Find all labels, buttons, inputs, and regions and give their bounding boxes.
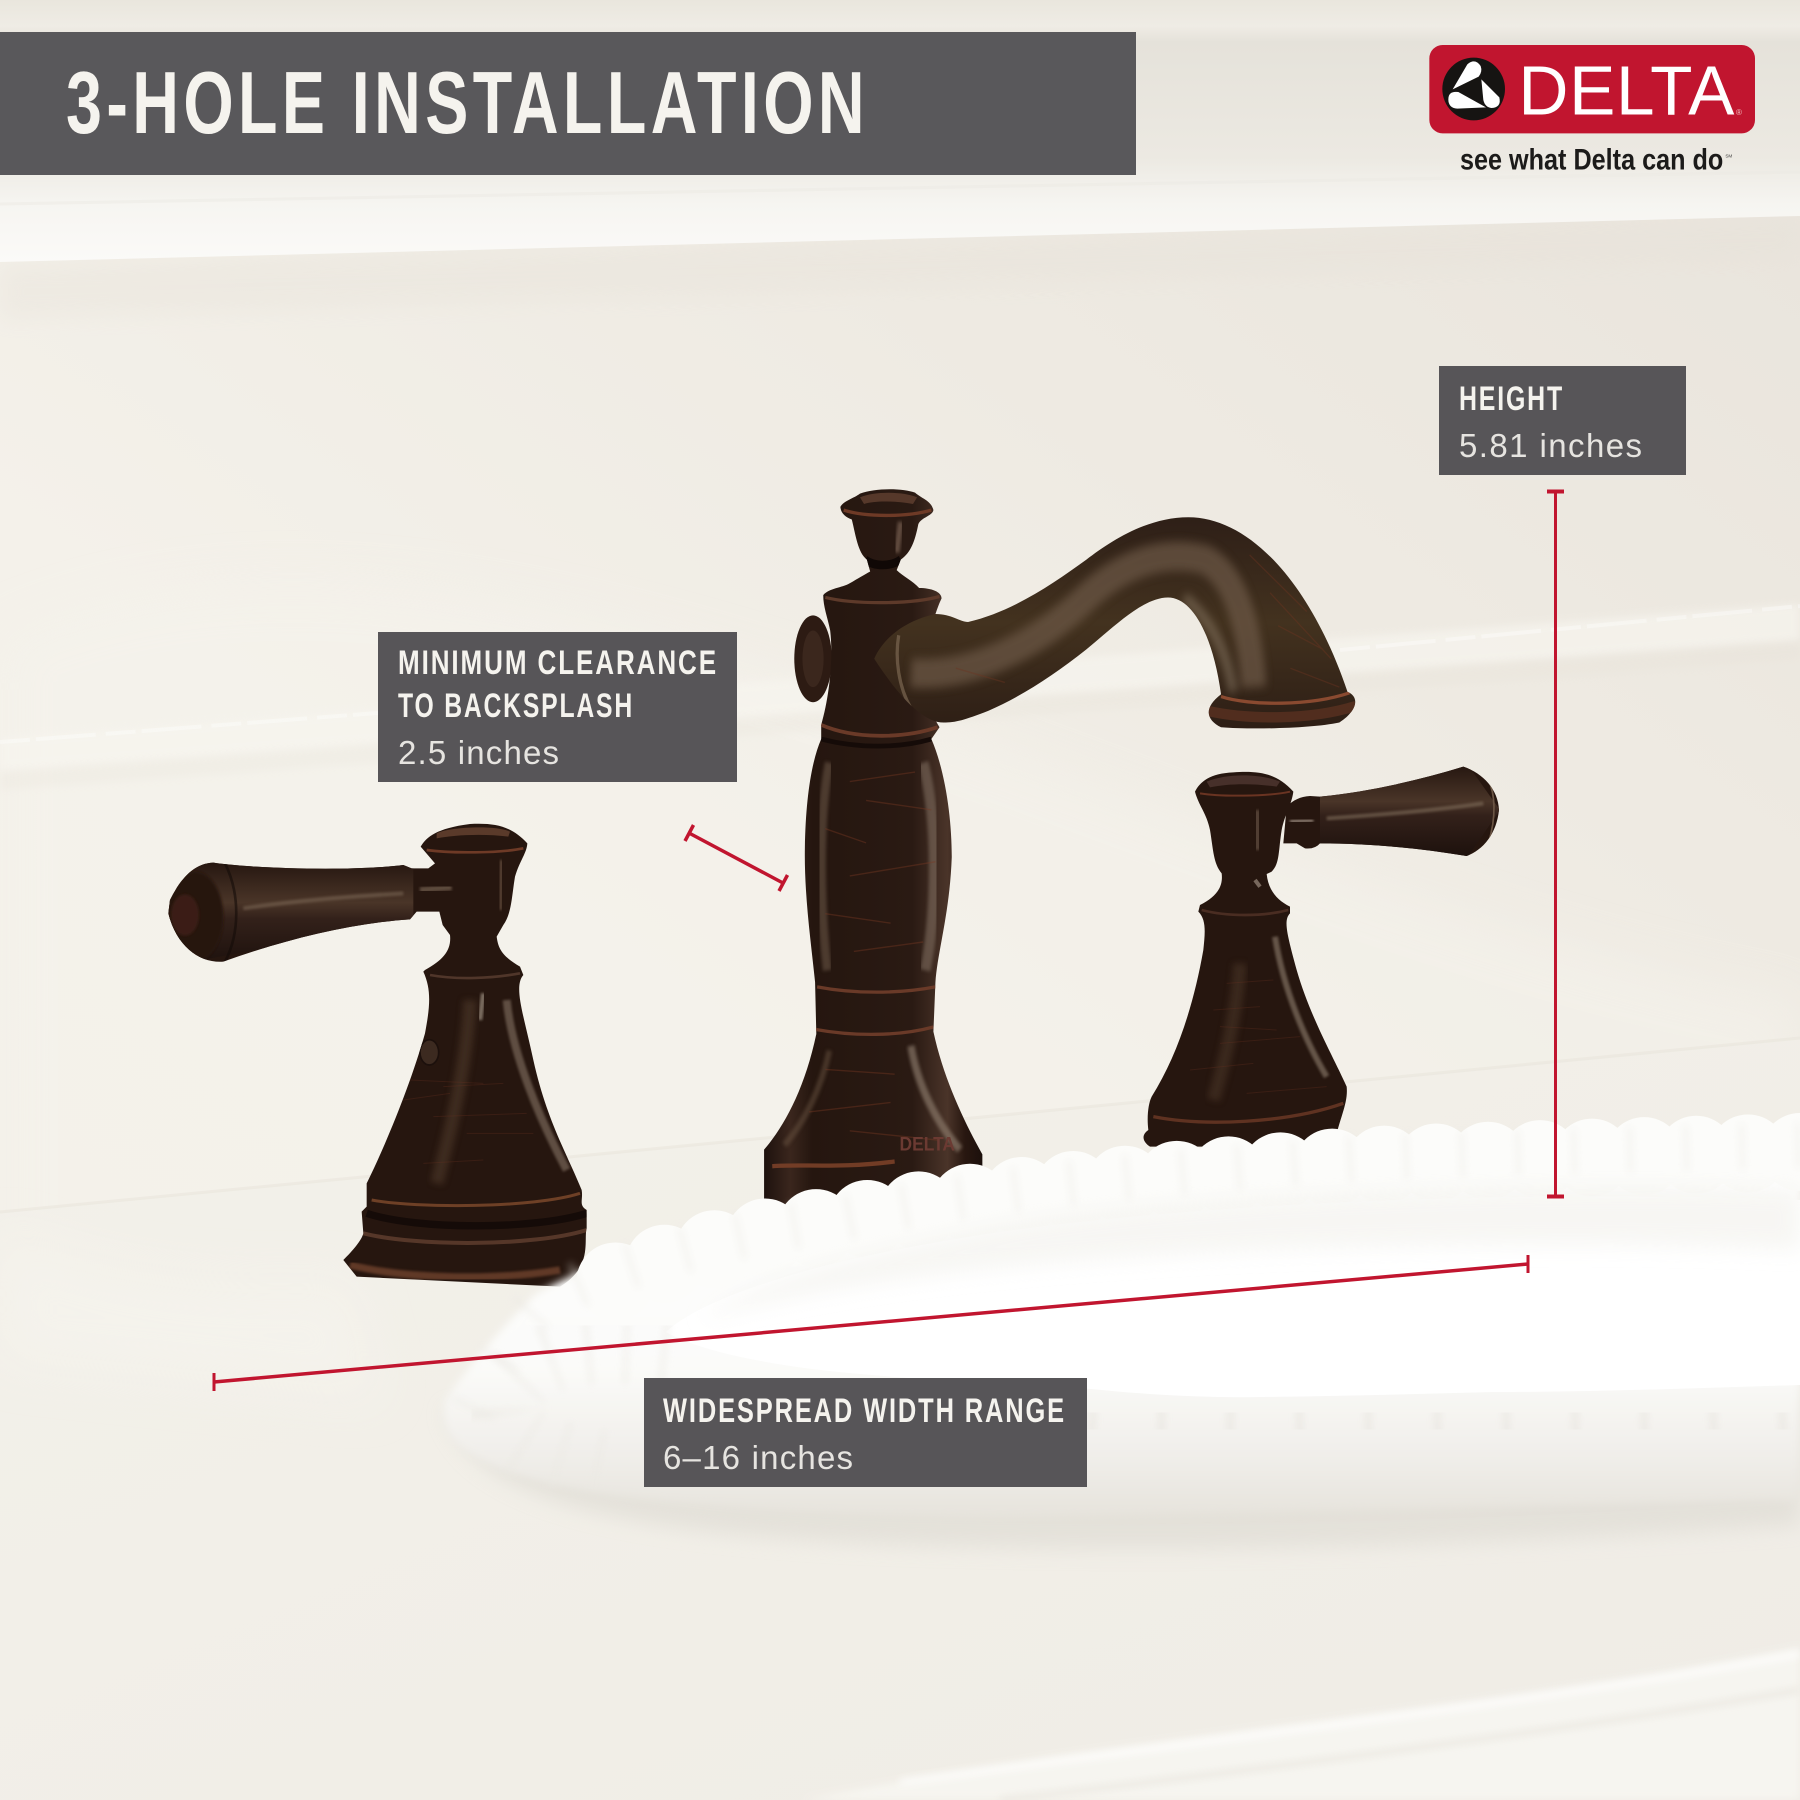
upper rim ribs (470, 1145, 1800, 1415)
left rim ribs (504, 1349, 666, 1465)
clearance heading second line: TO BACKSPLASH (398, 687, 634, 725)
tagline: see what Delta can do (1460, 144, 1723, 177)
background: bathroom wall (0, 0, 1800, 1300)
faucet post and finial (764, 489, 982, 1206)
height value: 5.81 inches (1459, 427, 1642, 464)
countertop (0, 1038, 1800, 1800)
sink shadow (445, 1380, 1800, 1549)
clearance heading: MINIMUM CLEARANCE (398, 644, 718, 682)
callout: widespread width range (644, 1378, 1087, 1487)
title: 3-HOLE INSTALLATION (66, 53, 869, 152)
width heading: WIDESPREAD WIDTH RANGE (663, 1392, 1066, 1430)
logo emblem (1442, 58, 1505, 120)
callout: height (1439, 366, 1686, 475)
white scalloped sink (444, 1135, 1800, 1518)
height heading: HEIGHT (1459, 380, 1564, 418)
lower rim ribs (1090, 1415, 1800, 1427)
right handle (1144, 763, 1500, 1147)
arrow: widespread width dimension (214, 1255, 1528, 1391)
faucet engraved brand mark: DELTA (900, 1132, 955, 1155)
registered mark: ® (1736, 108, 1742, 117)
logo wordmark: DELTA (1518, 51, 1735, 129)
left handle (167, 824, 587, 1287)
basin soft shading (700, 1186, 1800, 1320)
icon: rear valve nub (794, 615, 832, 702)
center faucet with spout (764, 489, 1356, 1206)
Delta logo (1429, 45, 1755, 177)
clearance value: 2.5 inches (398, 734, 559, 771)
sink bowl and rim (444, 1135, 1800, 1518)
spout (874, 517, 1356, 728)
service mark: SM (1725, 153, 1732, 158)
callout: minimum clearance (378, 632, 737, 782)
rim scallops (575, 1152, 1800, 1300)
sink basin (666, 1196, 1800, 1397)
logo red badge (1429, 45, 1755, 133)
arrow: clearance dimension (685, 825, 788, 891)
width value: 6–16 inches (663, 1439, 853, 1476)
title banner (0, 32, 1136, 175)
arrow: height dimension (1547, 491, 1564, 1197)
